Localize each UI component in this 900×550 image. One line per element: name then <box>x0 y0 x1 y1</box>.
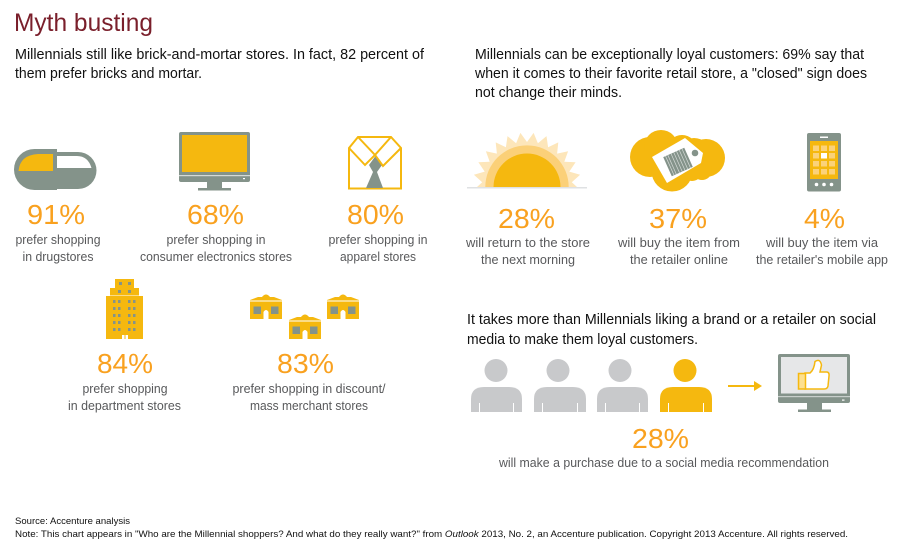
label: department stores: in department stores <box>68 399 181 413</box>
panel: apparel <box>328 137 428 264</box>
icon: smartphone <box>807 133 841 192</box>
label: consumer electronics <box>140 233 292 264</box>
text block: bricks and mortar: them prefer bricks and mortar. <box>15 66 202 82</box>
icon: pill <box>14 149 96 190</box>
stat: 68%: 68% <box>187 199 244 230</box>
label: consumer electronics: prefer shopping in <box>166 233 266 247</box>
icon: sun <box>467 133 587 188</box>
label: social: will make a purchase due to a social media recommendation <box>498 456 829 470</box>
label: consumer electronics: consumer electronics stores <box>140 250 292 264</box>
label: apparel <box>328 233 428 264</box>
title: Myth busting <box>14 9 153 37</box>
stat: 28% social: 28% <box>632 423 689 454</box>
icon: shirt <box>349 137 401 188</box>
icon: monitor with thumbs up <box>778 354 850 412</box>
stat: 4%: 4% <box>804 203 845 234</box>
text block: bricks and mortar <box>15 47 425 82</box>
stat: 83%: 83% <box>277 348 334 379</box>
icon: shops <box>250 294 359 339</box>
text block: loyal customers: not change their minds. <box>475 85 622 101</box>
panel: consumer electronics <box>140 132 292 264</box>
panel: return next morning <box>465 133 590 267</box>
panel: discount stores <box>232 294 386 413</box>
label: drugstores: prefer shopping <box>16 233 101 247</box>
icon: cloud with price tag <box>630 130 725 192</box>
stat: 80%: 80% <box>347 199 404 230</box>
footer: source and note: Source: Accenture analysis <box>15 516 130 527</box>
label: return: the next morning <box>481 253 575 267</box>
label: apparel: prefer shopping in <box>328 233 428 247</box>
panel: mobile app <box>756 133 888 267</box>
footer: source and note <box>15 516 848 540</box>
footer: source and note: Note: This chart appears in "Who are the Millennial shoppers? And what do they really want?" from Outlook 2013, No. 2, an Accenture publication. Copyright 2013 Accenture. All rights reserved. <box>15 529 848 540</box>
icon: four people <box>471 359 712 412</box>
label: return: will return to the store <box>465 236 590 250</box>
label: return <box>465 236 590 267</box>
arrow <box>728 381 762 391</box>
label: discount stores: mass merchant stores <box>250 399 368 413</box>
panel: social media <box>467 312 876 470</box>
label: department stores <box>68 382 181 413</box>
label: mobile: will buy the item via <box>765 236 878 250</box>
text block: loyal customers <box>474 47 867 101</box>
label: apparel: apparel stores <box>340 250 416 264</box>
panel: buy online <box>617 130 740 267</box>
label: discount stores <box>232 382 386 413</box>
stat: 37%: 37% <box>649 203 707 234</box>
text block: social media intro: media to make them loyal customers. <box>467 332 698 348</box>
text block: social media intro: It takes more than Millennials liking a brand or a retailer on social <box>467 312 876 328</box>
stat: 91%: 91% <box>27 199 85 230</box>
text block: bricks and mortar: Millennials still like brick-and-mortar stores. In fact, 82 percent of <box>15 47 425 63</box>
text block: loyal customers: Millennials can be exceptionally loyal customers: 69% say that <box>475 47 864 63</box>
label: department stores: prefer shopping <box>82 382 168 396</box>
text block: loyal customers: when it comes to their favorite retail store, a "closed" sign does <box>474 66 867 82</box>
stat: 84%: 84% <box>97 348 153 379</box>
panel: drugstores <box>14 149 101 264</box>
stat: 28% return: 28% <box>498 203 555 234</box>
label: mobile: the retailer's mobile app <box>756 253 888 267</box>
text block: social media intro <box>467 312 876 348</box>
panel: department stores <box>68 279 181 413</box>
label: online: will buy the item from <box>617 236 740 250</box>
label: mobile <box>756 236 888 267</box>
label: online: the retailer online <box>630 253 728 267</box>
label: discount stores: prefer shopping in discount/ <box>232 382 386 396</box>
label: drugstores: in drugstores <box>22 250 94 264</box>
icon: monitor <box>179 132 250 190</box>
label: drugstores <box>16 233 101 264</box>
icon: building <box>106 279 143 339</box>
label: online <box>617 236 740 267</box>
